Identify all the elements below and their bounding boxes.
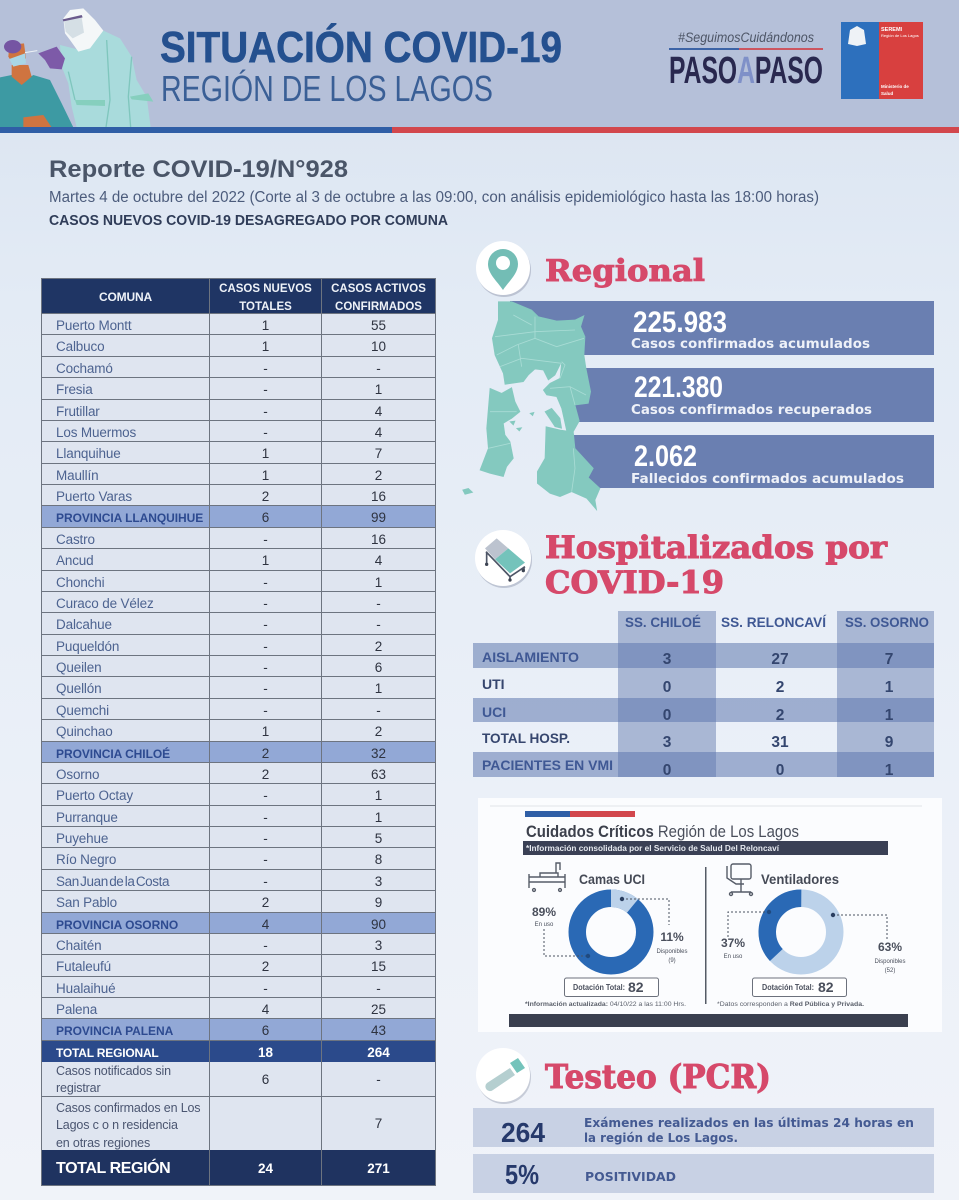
stat: positivity: 5% xyxy=(505,1159,539,1190)
table: cases by commune: Puerto Octay xyxy=(56,788,133,803)
table: cases by commune: 1 xyxy=(375,382,382,397)
table: cases by commune: Hualaihué xyxy=(56,981,115,996)
logo: Paso a Paso xyxy=(669,30,823,92)
logo: SEREMI Ministerio de Salud: Ministerio de xyxy=(881,84,909,89)
cases residing elsewhere row: 7 xyxy=(375,1116,382,1131)
cases residing elsewhere row: Casos confirmados en Los xyxy=(56,1101,200,1115)
table: cases by commune: Quinchao xyxy=(56,724,113,739)
table: hospitalized by health service: AISLAMIENTO xyxy=(482,649,579,665)
table: cases by commune: - xyxy=(263,532,268,547)
unregistered cases row: - xyxy=(376,1072,381,1087)
table: cases by commune: Puqueldón xyxy=(56,639,119,654)
province subtotal: Chiloé xyxy=(42,742,435,763)
table: cases by commune: 16 xyxy=(371,532,386,547)
table: cases by commune: 7 xyxy=(375,446,382,461)
table: cases by commune: Fresia xyxy=(56,382,93,397)
note bar xyxy=(523,841,888,855)
icon: location pin xyxy=(476,241,531,297)
donut chart: Ventiladores: 37% xyxy=(721,936,745,950)
report heading xyxy=(49,156,819,229)
table: hospitalized by health service: UCI xyxy=(482,704,506,720)
icon: ICU bed xyxy=(529,863,565,891)
table: cases by commune: Frutillar xyxy=(56,404,100,418)
table: cases by commune: Los Muermos xyxy=(56,425,136,440)
table: hospitalized by health service: 27 xyxy=(771,651,789,668)
province subtotal: Llanquihue: 99 xyxy=(371,510,386,525)
table: cases by commune: - xyxy=(376,596,381,611)
stat: cases recovered xyxy=(575,368,934,422)
table: cases by commune: 4 xyxy=(375,404,382,418)
table: cases by commune: Quemchi xyxy=(56,703,109,718)
table: cases by commune: 10 xyxy=(371,339,386,354)
table: cases by commune: Puerto Varas xyxy=(56,489,132,504)
unregistered cases row: Casos notificados sin xyxy=(56,1064,171,1078)
table: cases by commune: 3 xyxy=(375,938,382,953)
table: cases by commune: Llanquihue xyxy=(56,446,121,461)
stat: deaths accumulated: 2.062 xyxy=(634,440,697,473)
icon: hospital bed xyxy=(475,530,532,588)
table header: CASOS NUEVOS xyxy=(219,283,312,295)
table header: CONFIRMADOS xyxy=(335,301,422,313)
province subtotal: Osorno: 90 xyxy=(371,916,386,932)
stat: deaths accumulated: Fallecidos confirmados acumulados xyxy=(631,471,904,487)
donut chart: Camas UCI: En uso xyxy=(535,922,554,928)
province subtotal: Chiloé: 2 xyxy=(262,746,269,760)
heading: Hospitalizados por COVID-19: Hospitalizados por xyxy=(545,530,888,566)
table: cases by commune: - xyxy=(263,404,268,418)
map: Los Lagos region xyxy=(463,302,600,510)
footnotes xyxy=(525,1001,864,1008)
table: hospitalized by health service: 0 xyxy=(663,679,671,696)
table: cases by commune: Río Negro xyxy=(56,852,116,867)
table: cases by commune: - xyxy=(263,425,268,440)
province subtotal: Palena: 6 xyxy=(262,1023,269,1038)
table: cases by commune: - xyxy=(376,617,381,632)
table header xyxy=(42,279,435,314)
table: cases by commune: 9 xyxy=(375,895,382,910)
table: hospitalized by health service: 1 xyxy=(885,762,894,779)
table: cases by commune: - xyxy=(263,681,268,696)
table: cases by commune: 5 xyxy=(375,831,382,846)
table: cases by commune: 16 xyxy=(371,489,386,504)
table: cases by commune: 1 xyxy=(375,810,382,825)
table: cases by commune: - xyxy=(263,831,268,846)
table: cases by commune: Calbuco xyxy=(56,339,104,354)
title xyxy=(160,22,562,109)
province subtotal: Osorno: 4 xyxy=(262,916,269,932)
table: cases by commune: - xyxy=(376,703,381,718)
table: cases by commune: Queilen xyxy=(56,660,101,675)
panel: hospitalized xyxy=(473,530,934,779)
stat box: UCI total: Dotación Total: xyxy=(573,983,625,992)
table: cases by commune: Chaitén xyxy=(56,938,101,953)
table: cases by commune: 2 xyxy=(262,767,269,782)
grand total row: TOTAL REGIÓN xyxy=(56,1160,170,1177)
regional total row: 264 xyxy=(367,1045,390,1060)
stat: cases accumulated: 225.983 xyxy=(633,306,727,339)
stat box: UCI total xyxy=(564,978,658,996)
header banner xyxy=(0,0,959,128)
table: cases by commune: 3 xyxy=(375,874,382,889)
unregistered cases row: 6 xyxy=(262,1072,269,1087)
heading: Ventiladores: Ventiladores xyxy=(761,872,839,887)
table: hospitalized by health service: 3 xyxy=(663,651,672,668)
cases residing elsewhere row: en otras regiones xyxy=(56,1136,150,1150)
stat box: UCI total: 82 xyxy=(628,979,644,995)
heading: Regional: Regional xyxy=(545,254,705,289)
table header: COMUNA xyxy=(99,290,152,304)
logo: SEREMI Ministerio de Salud: Salud xyxy=(881,91,894,96)
stat box: ventilator total xyxy=(752,978,846,996)
table header: TOTALES xyxy=(239,301,292,313)
cases residing elsewhere row xyxy=(42,1097,435,1150)
table: cases by commune: Cochamó xyxy=(56,361,113,376)
table: cases by commune: 2 xyxy=(375,724,382,739)
province subtotal: Palena: 43 xyxy=(371,1023,386,1038)
stat box: ventilator total: 82 xyxy=(818,979,834,995)
stat: positivity xyxy=(473,1154,934,1193)
table: cases by commune: San Juan de la Costa xyxy=(56,874,169,889)
table: hospitalized by health service: 3 xyxy=(663,734,672,751)
table: cases by commune: 2 xyxy=(262,895,269,910)
heading: Cuidados Críticos: Cuidados Críticos Región de Los Lagos xyxy=(526,822,799,841)
table: hospitalized by health service: 7 xyxy=(885,651,893,668)
table: cases by commune: Curaco de Vélez xyxy=(56,596,154,611)
donut chart: Ventiladores: 63% xyxy=(878,940,902,954)
table: cases by commune: 1 xyxy=(375,681,382,696)
table: cases by commune: 4 xyxy=(375,553,382,568)
table: cases by commune: - xyxy=(263,574,268,590)
table: hospitalized by health service: 0 xyxy=(663,707,671,724)
heading: Camas UCI: Camas UCI xyxy=(579,872,645,887)
province subtotal: Llanquihue xyxy=(42,506,435,528)
stat: cases accumulated: Casos confirmados acumulados xyxy=(631,336,870,352)
note bar: *Información consolidada por el Servicio de Salud Del Reloncaví xyxy=(526,844,780,853)
footnotes: *Datos corresponden a Red Pública y Privada. xyxy=(717,1001,864,1008)
icon: test tube xyxy=(476,1048,531,1104)
donut chart: Camas UCI: Disponibles xyxy=(656,949,688,955)
table: cases by commune: - xyxy=(263,938,268,953)
stat: positivity: POSITIVIDAD xyxy=(585,1169,676,1184)
table: cases by commune: Futaleufú xyxy=(56,959,111,974)
table: cases by commune: Quellón xyxy=(56,681,101,696)
regional total row xyxy=(42,1041,435,1062)
stat: cases accumulated xyxy=(510,301,934,355)
report heading: Martes 4 de octubre del 2022 (Corte al 3 de octubre a las 09:00, con análisis epidemiológico hasta las 18:00 horas) xyxy=(49,189,819,206)
stat box: ventilator total: Dotación Total: xyxy=(762,983,814,992)
footnotes: *Información actualizada: 04/10/22 a las 11:00 Hrs. xyxy=(525,1001,686,1008)
table: cases by commune: 1 xyxy=(375,788,382,803)
table: cases by commune: Osorno xyxy=(56,767,99,782)
table: cases by commune: - xyxy=(263,639,268,654)
stat: exams xyxy=(473,1108,934,1148)
table: cases by commune: Dalcahue xyxy=(56,617,112,632)
donut chart: Ventiladores: (52) xyxy=(885,968,895,974)
heading: Hospitalizados por COVID-19 xyxy=(545,530,888,601)
table: cases by commune: Puerto Montt xyxy=(56,318,132,333)
table: cases by commune: 1 xyxy=(262,318,269,333)
province subtotal: Chiloé: PROVINCIA CHILOÉ xyxy=(56,746,170,760)
logo: SEREMI Ministerio de Salud: Región de Los Lagos xyxy=(881,33,919,38)
donut chart: Ventiladores xyxy=(721,884,906,980)
table: cases by commune: 1 xyxy=(262,468,269,483)
table: cases by commune: Chonchi xyxy=(56,574,104,590)
logo: Paso a Paso: PASOAPASO xyxy=(669,50,823,92)
table: hospitalized by health service: SS. OSORNO xyxy=(845,614,929,630)
table: cases by commune: - xyxy=(263,810,268,825)
table: hospitalized by health service: 9 xyxy=(885,734,894,751)
table: cases by commune: 4 xyxy=(262,1002,269,1017)
table: cases by commune: - xyxy=(263,981,268,996)
table: cases by commune: 1 xyxy=(262,724,269,739)
table: cases by commune: 2 xyxy=(262,489,269,504)
table: hospitalized by health service: 2 xyxy=(776,707,784,724)
province subtotal: Palena xyxy=(42,1019,435,1041)
cases residing elsewhere row: Lagos c o n residencia xyxy=(56,1118,178,1132)
illustration: health workers xyxy=(0,8,153,127)
table: cases by commune: Ancud xyxy=(56,553,94,568)
unregistered cases row xyxy=(42,1062,435,1097)
table: cases by commune: - xyxy=(263,852,268,867)
grand total row xyxy=(42,1150,435,1185)
donut chart: Ventiladores: Disponibles xyxy=(874,959,906,965)
table: cases by commune: Castro xyxy=(56,532,95,547)
table: cases by commune: 4 xyxy=(375,425,382,440)
province subtotal: Llanquihue: PROVINCIA LLANQUIHUE xyxy=(56,511,203,525)
table: cases by commune: Puyehue xyxy=(56,831,108,846)
logo: Paso a Paso: #SeguimosCuidándonos xyxy=(678,30,814,45)
panel: regional xyxy=(463,241,934,510)
table: cases by commune: - xyxy=(263,596,268,611)
table: cases by commune: 1 xyxy=(375,574,382,590)
panel: PCR testing xyxy=(473,1048,934,1193)
icon: ventilator xyxy=(727,864,752,896)
table: cases by commune: 6 xyxy=(375,660,382,675)
table: cases by commune: - xyxy=(376,361,381,376)
province subtotal: Palena: PROVINCIA PALENA xyxy=(56,1024,173,1038)
table: cases by commune: 15 xyxy=(371,959,386,974)
table: cases by commune: - xyxy=(263,874,268,889)
table: hospitalized by health service: PACIENTES EN VMI xyxy=(482,757,613,773)
table: cases by commune: 1 xyxy=(262,339,269,354)
table: hospitalized by health service: 0 xyxy=(776,762,784,779)
table: cases by commune: 25 xyxy=(371,1002,386,1017)
table: hospitalized by health service xyxy=(473,611,934,779)
table: cases by commune: 1 xyxy=(262,553,269,568)
unregistered cases row: registrar xyxy=(56,1081,100,1095)
regional total row: TOTAL REGIONAL xyxy=(56,1046,159,1060)
table: cases by commune xyxy=(42,279,435,1185)
table: cases by commune: - xyxy=(376,981,381,996)
grand total row: 271 xyxy=(367,1161,390,1176)
table: hospitalized by health service: TOTAL HOSP. xyxy=(482,730,570,746)
table: hospitalized by health service: UTI xyxy=(482,676,505,692)
donut chart: Ventiladores: En uso xyxy=(724,954,743,960)
table: cases by commune: Maullín xyxy=(56,468,98,483)
table: cases by commune: 63 xyxy=(371,767,386,782)
table: hospitalized by health service: 31 xyxy=(771,734,789,751)
table: cases by commune: Purranque xyxy=(56,810,118,825)
table: cases by commune: 55 xyxy=(371,318,386,333)
table: hospitalized by health service: 0 xyxy=(663,762,671,779)
panel: critical care xyxy=(478,798,942,1032)
header stripe xyxy=(0,127,959,133)
table: cases by commune: 2 xyxy=(262,959,269,974)
donut chart: Camas UCI: 89% xyxy=(532,905,556,919)
table: cases by commune: - xyxy=(263,660,268,675)
table: cases by commune: - xyxy=(263,617,268,632)
table: hospitalized by health service: SS. CHILOÉ xyxy=(625,614,701,630)
table: hospitalized by health service: 1 xyxy=(885,707,894,724)
table: cases by commune: 2 xyxy=(375,639,382,654)
donut chart: Camas UCI: 11% xyxy=(660,930,684,944)
title: REGIÓN DE LOS LAGOS xyxy=(161,68,493,109)
donut chart: Camas UCI: (9) xyxy=(668,958,676,964)
table: cases by commune: 1 xyxy=(262,446,269,461)
table: cases by commune: - xyxy=(263,703,268,718)
heading: Hospitalizados por COVID-19: COVID-19 xyxy=(545,565,724,601)
stat: exams: Exámenes realizados en las últimas 24 horas en xyxy=(584,1115,914,1130)
province subtotal: Chiloé: 32 xyxy=(371,746,386,760)
table header: CASOS ACTIVOS xyxy=(331,283,426,295)
table: hospitalized by health service: 1 xyxy=(885,679,894,696)
title: SITUACIÓN COVID-19 xyxy=(160,22,562,72)
province subtotal: Osorno xyxy=(42,912,435,934)
table: cases by commune: 8 xyxy=(375,852,382,867)
report heading: CASOS NUEVOS COVID-19 DESAGREGADO POR COMUNA xyxy=(49,213,449,229)
table: hospitalized by health service: 2 xyxy=(776,679,784,696)
stat: cases recovered: 221.380 xyxy=(634,371,723,404)
table: cases by commune: - xyxy=(263,788,268,803)
report heading: Reporte COVID-19/N°928 xyxy=(49,156,348,183)
stat: cases recovered: Casos confirmados recuperados xyxy=(631,402,872,418)
table: cases by commune: - xyxy=(263,361,268,376)
logo: SEREMI Ministerio de Salud: SEREMI xyxy=(881,27,903,33)
province subtotal: Osorno: PROVINCIA OSORNO xyxy=(56,918,178,932)
table: cases by commune: Palena xyxy=(56,1002,97,1017)
province subtotal: Llanquihue: 6 xyxy=(262,510,269,525)
table: cases by commune: 2 xyxy=(375,468,382,483)
regional total row: 18 xyxy=(258,1045,273,1060)
table: cases by commune: - xyxy=(263,382,268,397)
table: cases by commune: San Pablo xyxy=(56,895,117,910)
stat: exams: la región de Los Lagos. xyxy=(584,1130,738,1145)
stat: deaths accumulated xyxy=(572,435,934,488)
table: hospitalized by health service: SS. RELONCAVÍ xyxy=(721,614,827,630)
heading: Testeo (PCR): Testeo (PCR) xyxy=(545,1057,771,1096)
grand total row: 24 xyxy=(258,1161,273,1176)
logo: SEREMI Ministerio de Salud xyxy=(841,22,923,99)
stat: exams: 264 xyxy=(501,1117,545,1148)
donut chart: Camas UCI xyxy=(532,897,688,966)
